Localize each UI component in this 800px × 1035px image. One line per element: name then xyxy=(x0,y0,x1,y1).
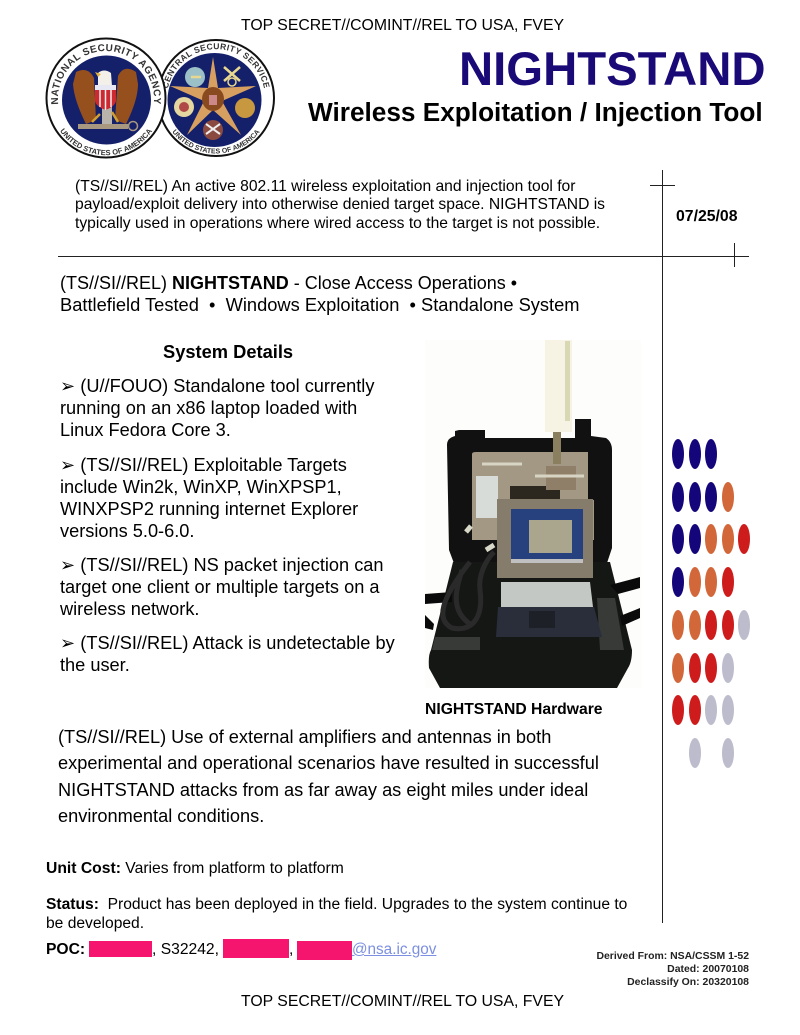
range paragraph xyxy=(58,727,599,826)
straps xyxy=(425,577,640,630)
bottom classification banner: TOP SECRET//COMINT//REL TO USA, FVEY xyxy=(241,993,564,1010)
bullet: undetectable xyxy=(60,633,395,675)
point of contact: , xyxy=(289,941,293,958)
bullet: exploitable targets: include Win2k, WinXP, WinXPSP1, xyxy=(60,477,342,497)
top classification banner: TOP SECRET//COMINT//REL TO USA, FVEY xyxy=(241,17,564,34)
title: NIGHTSTAND xyxy=(459,43,766,96)
redaction xyxy=(89,941,152,957)
declassification block: Declassify On: 20320108 xyxy=(627,977,749,988)
photo caption: NIGHTSTAND Hardware xyxy=(425,701,603,718)
bullet: undetectable: ➢ (TS//SI//REL) Attack is undetectable by xyxy=(60,633,395,653)
icon: national security agency seal xyxy=(46,38,166,158)
range paragraph: NIGHTSTAND attacks from as far away as eight miles under ideal xyxy=(58,780,588,800)
subtitle: Wireless Exploitation / Injection Tool xyxy=(308,97,763,127)
system details heading: System Details xyxy=(163,341,293,362)
redaction xyxy=(223,939,289,958)
laptop screen xyxy=(497,499,593,578)
bullet: packet injection: wireless network. xyxy=(60,599,199,619)
icon: central security service seal xyxy=(162,39,275,157)
feature summary: (TS//SI//REL) NIGHTSTAND - Close Access Operations • xyxy=(60,273,517,293)
range paragraph: environmental conditions. xyxy=(58,806,264,826)
bullet: packet injection: target one client or multiple targets on a xyxy=(60,577,379,597)
range paragraph: (TS//SI//REL) Use of external amplifiers and antennas in both xyxy=(58,727,551,747)
bullet: exploitable targets xyxy=(60,455,358,541)
cables xyxy=(443,552,494,629)
status xyxy=(46,896,627,932)
case lid xyxy=(447,419,612,566)
bullet: standalone tool: ➢ (U//FOUO) Standalone tool currently xyxy=(60,376,374,396)
icon: central security service seal: UNITED STATES OF AMERICA xyxy=(172,129,260,154)
unit cost: Unit Cost: Varies from platform to platform xyxy=(46,860,344,877)
icon: national security agency seal: UNITED STATES OF AMERICA xyxy=(60,128,152,156)
intro text block: typically used in operations where wired access to the target is not possible. xyxy=(75,215,600,232)
range paragraph: experimental and operational scenarios have resulted in successful xyxy=(58,753,599,773)
system details bullets xyxy=(60,376,395,675)
photo: nightstand hardware in open case xyxy=(425,340,640,688)
equipment panel xyxy=(472,452,594,540)
icon: central security service seal: CENTRAL SECURITY SERVICE xyxy=(164,43,270,88)
declassification block xyxy=(596,951,749,988)
case base xyxy=(429,562,632,688)
icon: national security agency seal: NATIONAL SECURITY AGENCY xyxy=(51,44,161,104)
declassification block: Derived From: NSA/CSSM 1-52 xyxy=(596,951,749,962)
decorative dot pattern xyxy=(672,439,750,768)
bullet: exploitable targets: ➢ (TS//SI//REL) Exploitable Targets xyxy=(60,455,347,475)
intro text block: payload/exploit delivery into otherwise denied target space. NIGHTSTAND is xyxy=(75,196,605,213)
intro text block xyxy=(75,178,605,232)
bullet: standalone tool: Linux Fedora Core 3. xyxy=(60,420,231,440)
point of contact: , S32242, xyxy=(152,941,219,958)
bullet: exploitable targets: WINXPSP2 running internet Explorer xyxy=(60,499,358,519)
bullet: packet injection xyxy=(60,555,384,619)
icon: agency seals xyxy=(46,38,275,158)
bullet: standalone tool xyxy=(60,376,374,440)
case tray details xyxy=(432,598,624,650)
status: be developed. xyxy=(46,915,144,932)
feature summary: Battlefield Tested • Windows Exploitation • Standalone System xyxy=(60,294,580,315)
redaction xyxy=(297,941,352,960)
laptop keyboard xyxy=(496,582,602,637)
bullet: undetectable: the user. xyxy=(60,655,130,675)
bullet: standalone tool: running on an x86 laptop loaded with xyxy=(60,398,357,418)
declassification block: Dated: 20070108 xyxy=(667,964,749,975)
point of contact: POC: xyxy=(46,941,85,958)
bullet: packet injection: ➢ (TS//SI//REL) NS packet injection can xyxy=(60,555,384,575)
status: Status: Product has been deployed in the field. Upgrades to the system continue to xyxy=(46,896,627,913)
date: 07/25/08 xyxy=(676,208,738,225)
bullet: exploitable targets: versions 5.0-6.0. xyxy=(60,521,194,541)
antenna xyxy=(545,340,572,464)
point of contact: @nsa.ic.gov xyxy=(352,941,436,958)
feature summary xyxy=(60,273,580,315)
point of contact xyxy=(46,939,436,960)
intro text block: (TS//SI//REL) An active 802.11 wireless exploitation and injection tool for xyxy=(75,178,575,195)
